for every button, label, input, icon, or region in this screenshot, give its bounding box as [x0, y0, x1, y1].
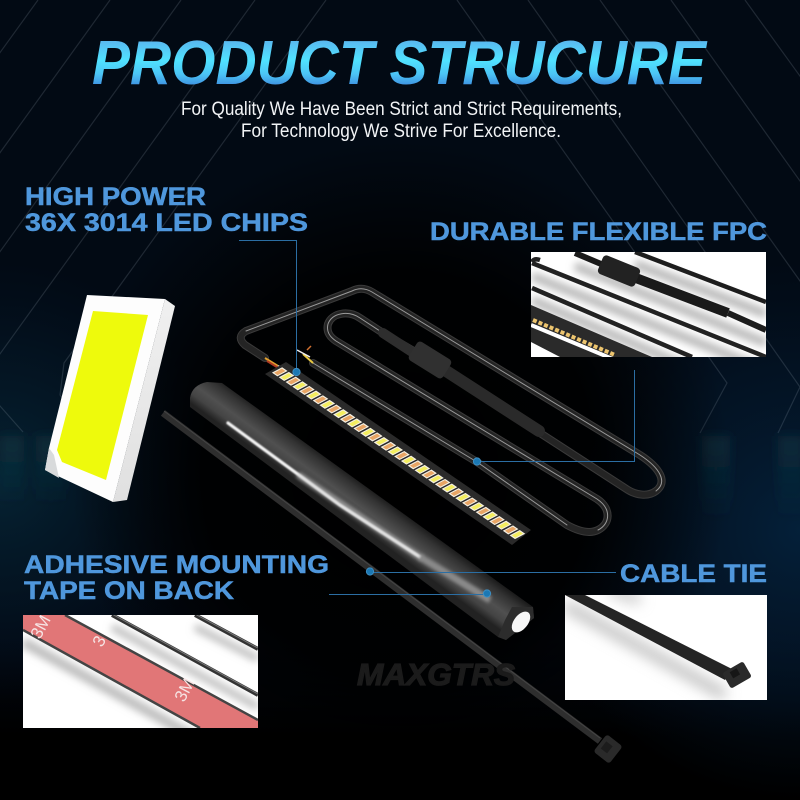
heading: high power led chips: HIGH POWER	[25, 183, 206, 211]
dot	[366, 568, 374, 575]
3M print	[31, 615, 194, 702]
3M print: 3M	[27, 612, 55, 642]
title: PRODUCT STRUCURE	[92, 29, 708, 98]
wire ends	[265, 346, 313, 369]
heading: high power led chips: 36X 3014 LED CHIPS	[25, 209, 308, 237]
panel: fpc photo	[531, 252, 766, 357]
light tube	[190, 382, 534, 640]
subtitle: For Quality We Have Been Strict and Strict Requirements,	[181, 99, 622, 120]
inline connector	[407, 340, 453, 380]
strip	[531, 305, 652, 357]
leader: adhesive tape	[329, 590, 491, 597]
heading: cable tie: CABLE TIE	[620, 560, 767, 588]
heading: high power led chips	[25, 183, 308, 237]
heading: adhesive mounting tape: TAPE ON BACK	[24, 577, 234, 605]
cable tie product	[163, 411, 623, 764]
3M print: 3	[89, 633, 110, 650]
3M print: 3M	[171, 675, 199, 705]
dot	[483, 590, 491, 597]
red tape	[23, 615, 258, 728]
dot	[293, 368, 300, 376]
tube end cap	[508, 608, 534, 636]
leader: led chips	[239, 240, 300, 376]
panel: adhesive tape photo	[23, 615, 258, 728]
leader: cable tie	[366, 568, 616, 575]
watermark: MAXGTRS	[357, 657, 515, 692]
subtitle	[181, 99, 622, 142]
subtitle: For Technology We Strive For Excellence.	[241, 121, 561, 142]
leader: fpc	[473, 370, 634, 465]
head	[726, 662, 751, 688]
heading: adhesive mounting tape	[24, 551, 329, 605]
led chip illustration	[45, 295, 175, 502]
strap	[565, 595, 732, 680]
cable loop	[241, 289, 662, 532]
heading: adhesive mounting tape: ADHESIVE MOUNTING	[24, 551, 329, 579]
led strip	[265, 362, 531, 545]
panel: cable tie photo	[565, 590, 767, 700]
dot	[473, 458, 481, 465]
connector	[597, 254, 641, 288]
heading: durable flexible fpc: DURABLE FLEXIBLE FPC	[430, 218, 767, 246]
